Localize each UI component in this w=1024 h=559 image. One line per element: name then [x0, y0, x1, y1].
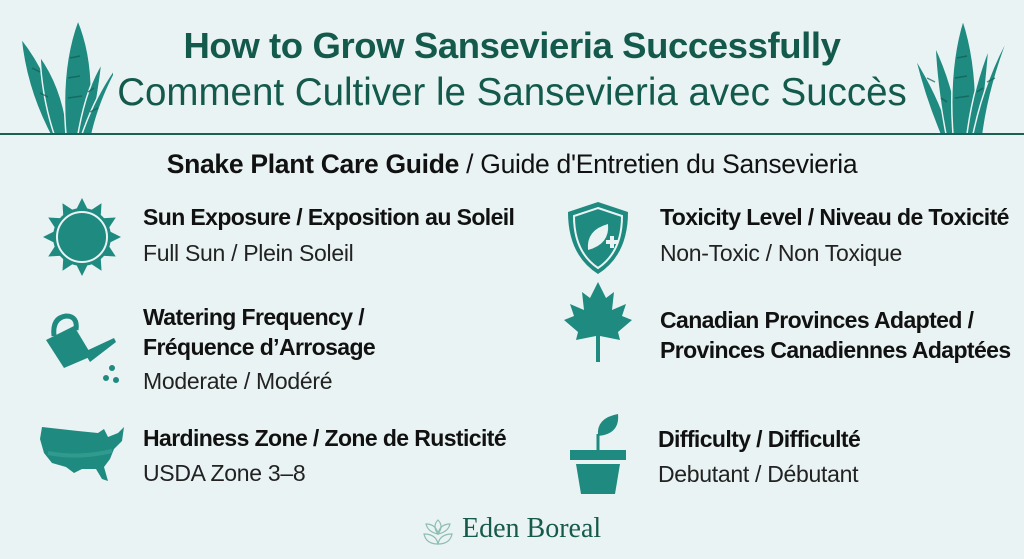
- text: difficulty: [658, 426, 860, 487]
- text: sun: [143, 204, 514, 266]
- text: watering: [143, 304, 375, 394]
- icon: usa map: [40, 427, 124, 481]
- text: hardiness: Hardiness Zone / Zone de Rusticité: [143, 425, 506, 451]
- text: watering: Moderate / Modéré: [143, 368, 332, 394]
- text: toxicity: Non-Toxic / Non Toxique: [660, 240, 902, 266]
- title: How to Grow Sansevieria Successfully: [183, 25, 841, 66]
- text: provinces: Canadian Provinces Adapted /: [660, 307, 973, 333]
- text: watering: Watering Frequency /: [143, 304, 364, 330]
- text: sun: Full Sun / Plein Soleil: [143, 240, 353, 266]
- icon: maple leaf: [564, 282, 632, 362]
- footer logo: Eden Boreal: [462, 513, 601, 544]
- text: provinces: [660, 307, 1011, 363]
- icon: shield: [568, 202, 628, 274]
- text: difficulty: Debutant / Débutant: [658, 461, 858, 487]
- text: difficulty: Difficulty / Difficulté: [658, 426, 860, 452]
- icon: pot: [570, 414, 626, 494]
- text: sun: Sun Exposure / Exposition au Soleil: [143, 204, 514, 230]
- plant left: [22, 22, 113, 133]
- text: hardiness: [143, 425, 506, 486]
- title: Comment Cultiver le Sansevieria avec Succès: [117, 71, 907, 114]
- text: watering: Fréquence d’Arrosage: [143, 334, 375, 360]
- text: provinces: Provinces Canadiennes Adaptées: [660, 337, 1011, 363]
- text: hardiness: USDA Zone 3–8: [143, 460, 305, 486]
- plant right: [917, 22, 1005, 133]
- icon: sun: [43, 198, 121, 276]
- icon: watering can: [46, 314, 119, 383]
- text: toxicity: [660, 204, 1009, 266]
- subtitle: Snake Plant Care Guide / Guide d'Entretien du Sansevieria: [167, 149, 857, 179]
- text: toxicity: Toxicity Level / Niveau de Toxicité: [660, 204, 1009, 230]
- title: [117, 25, 907, 114]
